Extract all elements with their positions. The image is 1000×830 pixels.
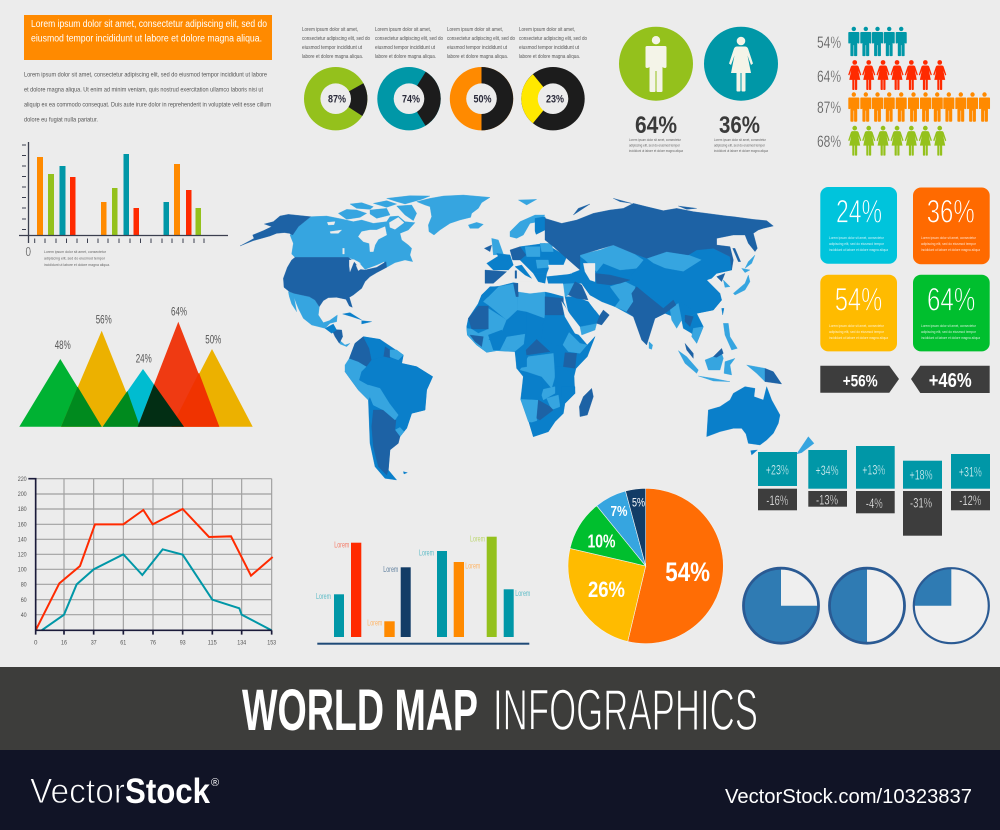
triangle chart: 50%	[205, 332, 222, 346]
stat card: 36%: 36%	[927, 193, 975, 229]
map: Europe, Asia, Africa and Oceania	[467, 198, 814, 455]
donut chart: 23%: Lorem ipsum dolor sit amet,	[519, 27, 575, 33]
line chart: 115	[208, 640, 217, 646]
pictogram row: 64%	[817, 60, 946, 90]
line chart: 40	[21, 612, 27, 619]
line chart: 60	[21, 597, 27, 604]
stat card: 54%: incididunt ut labore et dolore magna aliqua	[829, 336, 889, 340]
stat card: 24%	[820, 187, 897, 264]
labelled column chart: bottom centre: Lorem	[515, 589, 530, 598]
gender stat: female 36%	[704, 27, 778, 153]
stat card: 64%	[913, 275, 990, 351]
plus and minus stat columns: -13%	[816, 491, 838, 507]
line chart: 80	[21, 582, 27, 588]
triangle chart	[19, 304, 253, 427]
pictogram row: 68%	[817, 126, 946, 156]
donut chart: 23%: eiusmod tempor incididunt ut	[519, 45, 579, 51]
donut chart: 87%: eiusmod tempor incididunt ut	[302, 45, 362, 51]
line chart: 134	[237, 640, 247, 646]
donut chart: 23%	[519, 27, 587, 130]
donut chart: 74%: labore et dolore magna aliqua.	[375, 54, 436, 60]
line chart: 61	[120, 640, 127, 646]
pie chart: 26%	[588, 577, 625, 602]
title band: WORLD MAP	[242, 678, 478, 743]
triangle chart: 56%	[96, 312, 112, 326]
intro paragraph: Lorem ipsum dolor sit amet, consectetur adipiscing elit, sed do eiusmod tempor incididunt ut labore	[24, 72, 267, 78]
intro callout: orange box: Lorem ipsum dolor sit amet, consectetur adipiscing elit, sed do	[31, 19, 267, 30]
donut chart: 50%: labore et dolore magna aliqua.	[447, 54, 508, 60]
stat card: 24%: incididunt ut labore et dolore magna aliqua	[829, 248, 889, 252]
plus and minus stat columns: +13%	[862, 461, 885, 477]
triangle chart: 64%	[171, 304, 187, 318]
donut chart: 74%: eiusmod tempor incididunt ut	[375, 45, 435, 51]
footer band with VectorStock credit: ®	[211, 777, 219, 789]
stat card: 54%: Lorem ipsum dolor sit amet, consectetur	[829, 324, 885, 328]
donut chart: 74%: 74%	[402, 94, 420, 106]
donut chart: 87%: Lorem ipsum dolor sit amet,	[302, 27, 358, 33]
line chart: 153	[267, 640, 277, 646]
donut chart: 74%: Lorem ipsum dolor sit amet,	[375, 27, 431, 33]
gender stat: male 64%: adipiscing elit, sed do eiusmod tempor	[629, 144, 681, 148]
labelled column chart: bottom centre	[316, 535, 530, 645]
plus and minus stat columns: -4%	[866, 495, 883, 511]
pie chart: 54%	[665, 557, 710, 587]
stat card: 36%	[913, 188, 990, 264]
fraction circle: three quarters	[744, 568, 818, 643]
stat card: 64%: adipiscing elit, sed do eiusmod tempor	[921, 330, 977, 334]
fraction circle: one quarter	[914, 568, 989, 643]
donut chart: 50%: Lorem ipsum dolor sit amet,	[447, 27, 503, 33]
pie chart: 5%	[632, 495, 645, 509]
stat card: 36%: Lorem ipsum dolor sit amet, consectetur	[921, 236, 977, 240]
donut chart: 23%: labore et dolore magna aliqua.	[519, 54, 580, 60]
pie chart	[568, 488, 723, 644]
line chart: 140	[18, 536, 27, 544]
intro paragraph: et dolore magna aliqua. Ut enim ad minim veniam, quis nostrud exercitation ullamco laboris nisi ut	[24, 86, 263, 94]
pictogram row: 54%: 54%	[817, 33, 841, 52]
stat card: 54%: adipiscing elit, sed do eiusmod tempor	[829, 330, 885, 334]
plus and minus stat columns: -12%	[959, 492, 981, 508]
stat card: 36%: adipiscing elit, sed do eiusmod tempor	[921, 242, 977, 246]
plus and minus stat columns	[758, 446, 990, 536]
arrow tag: +56%: +56%	[843, 372, 878, 390]
stat card: 64%: incididunt ut labore et dolore magna aliqua	[921, 336, 981, 340]
arrow tag: +56%	[820, 366, 899, 393]
triangle chart: 48%	[55, 338, 71, 352]
footer band with VectorStock credit: VectorStock.com/10323837	[725, 785, 972, 808]
stat card: 54%	[820, 275, 897, 351]
world map	[240, 195, 814, 480]
gender stat: male 64%: incididunt ut labore et dolore magna aliqua	[629, 149, 684, 153]
line chart: 160	[18, 522, 27, 528]
donut chart: 50%: eiusmod tempor incididunt ut	[447, 45, 507, 51]
line chart: 16	[61, 640, 67, 646]
arrow tag: +46%: +46%	[929, 370, 972, 392]
gender stat: female 36%: incididunt ut labore et dolore magna aliqua	[714, 149, 769, 153]
column chart: top left: adipiscing elit, sed do eiusmod tempor	[44, 256, 106, 260]
plus and minus stat columns: -16%	[766, 492, 788, 508]
pictogram row: 64%: 64%	[817, 67, 841, 86]
line chart: 100	[18, 566, 27, 574]
footer band with VectorStock credit: Stock	[125, 772, 210, 811]
line chart: 93	[180, 640, 186, 646]
gender stat: female 36%: adipiscing elit, sed do eiusmod tempor	[714, 144, 766, 148]
gender stat: male 64%: 64%	[635, 112, 677, 139]
intro paragraph: dolore eu fugiat nulla pariatur.	[24, 116, 98, 124]
plus and minus stat columns: +34%	[816, 462, 838, 478]
gender stat: female 36%: 36%	[719, 112, 760, 139]
map: Americas	[240, 195, 490, 480]
stat card: 54%: 54%	[835, 282, 882, 318]
intro callout: orange box	[24, 15, 272, 60]
intro paragraph: aliquip ex ea commodo consequat. Duis aute irure dolor in reprehenderit in voluptate velit esse cillum	[24, 102, 271, 108]
donut chart: 74%	[375, 27, 443, 130]
title band: INFOGRAPHICS	[493, 678, 758, 743]
stat card: 24%: Lorem ipsum dolor sit amet, consectetur	[829, 236, 885, 240]
footer band with VectorStock credit: Vector	[30, 772, 125, 811]
gender stat: male 64%: Lorem ipsum dolor sit amet, consectetur	[629, 138, 682, 142]
gender stat: female 36%: Lorem ipsum dolor sit amet, consectetur	[714, 138, 767, 142]
labelled column chart: bottom centre: Lorem	[383, 565, 398, 574]
stat card: 64%: 64%	[927, 282, 975, 318]
labelled column chart: bottom centre: Lorem	[465, 562, 480, 571]
plus and minus stat columns: +23%	[766, 462, 789, 478]
gender stat: male 64%	[619, 27, 693, 153]
labelled column chart: bottom centre: Lorem	[470, 535, 485, 544]
donut chart: 74%: consectetur adipiscing elit, sed do	[375, 36, 443, 42]
triangle chart: 24%	[136, 352, 152, 366]
pictogram row: 87%	[817, 92, 990, 122]
donut chart: 50%	[447, 27, 515, 130]
stat card: 36%: incididunt ut labore et dolore magna aliqua	[921, 248, 981, 252]
intro callout: orange box: eiusmod tempor incididunt ut labore et dolore magna aliqua.	[31, 34, 262, 44]
donut chart: 87%: 87%	[328, 94, 346, 106]
donut chart: 23%: 23%	[546, 94, 564, 106]
line chart: 220	[18, 476, 27, 483]
donut chart: 87%	[302, 27, 370, 130]
pictogram row: 68%: 68%	[817, 132, 841, 151]
footer band with VectorStock credit	[0, 750, 1000, 830]
intro paragraph	[24, 72, 271, 124]
stat card: 24%: adipiscing elit, sed do eiusmod tempor	[829, 242, 885, 246]
plus and minus stat columns: +18%	[910, 467, 932, 483]
stat card: 24%: 24%	[836, 193, 882, 229]
stat card: 64%: Lorem ipsum dolor sit amet, consectetur	[921, 324, 977, 328]
column chart: top left	[19, 142, 228, 267]
line chart: 120	[18, 552, 27, 558]
line chart: 0	[34, 640, 38, 646]
labelled column chart: bottom centre: Lorem	[316, 592, 331, 601]
fraction circle: half	[830, 568, 904, 643]
labelled column chart: bottom centre: Lorem	[367, 619, 382, 628]
labelled column chart: bottom centre: Lorem	[334, 540, 349, 549]
line chart: 37	[91, 640, 97, 646]
title band	[0, 667, 1000, 750]
plus and minus stat columns: -31%	[910, 494, 932, 510]
pictogram row: 87%: 87%	[817, 98, 841, 117]
pictogram row: 54%	[817, 27, 907, 56]
arrow tag: +46%	[911, 366, 990, 393]
donut chart: 50%: 50%	[474, 94, 492, 106]
line chart: 200	[18, 491, 27, 498]
column chart: top left: 0	[26, 244, 31, 259]
donut chart: 23%: consectetur adipiscing elit, sed do	[519, 36, 587, 42]
column chart: top left: incididunt ut labore et dolore magna aliqua.	[44, 263, 110, 267]
donut chart: 50%: consectetur adipiscing elit, sed do	[447, 36, 515, 42]
pie chart: 10%	[588, 531, 616, 552]
line chart	[18, 476, 277, 646]
labelled column chart: bottom centre: Lorem	[419, 549, 434, 558]
line chart: 76	[150, 640, 156, 646]
plus and minus stat columns: +31%	[959, 463, 982, 479]
pie chart: 7%	[610, 503, 628, 520]
donut chart: 87%: labore et dolore magna aliqua.	[302, 54, 363, 60]
donut chart: 87%: consectetur adipiscing elit, sed do	[302, 36, 370, 42]
line chart: 180	[18, 506, 27, 513]
column chart: top left: Lorem ipsum dolor sit amet, consectetur	[44, 250, 107, 254]
